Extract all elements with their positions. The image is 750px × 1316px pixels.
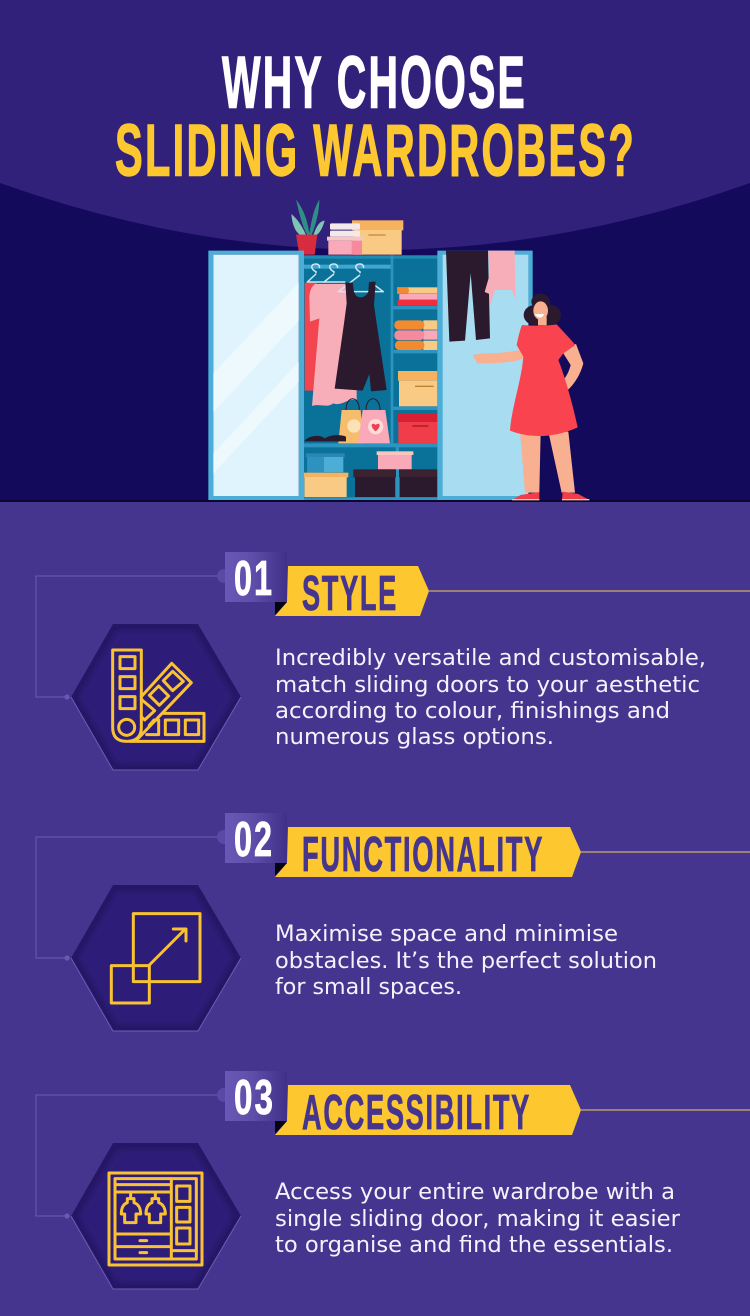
illustration: wardrobe and woman — [208, 199, 589, 500]
left sliding door with mirror — [208, 251, 304, 500]
body text — [275, 922, 657, 1000]
heading ribbon — [275, 566, 750, 621]
body text: Incredibly versatile and customisable, — [275, 646, 706, 671]
number badge: 01 — [234, 552, 274, 606]
hexagon icon background — [71, 624, 241, 770]
hexagon icon background — [71, 885, 241, 1031]
body text: for small spaces. — [275, 975, 462, 1000]
icon: expanding squares with arrow — [111, 914, 200, 1003]
section 02: functionality — [36, 813, 750, 1031]
body text: Maximise space and minimise — [275, 922, 618, 947]
shelf boxes — [397, 371, 437, 443]
connector line — [36, 569, 231, 700]
body text: obstacles. It’s the perfect solution — [275, 949, 657, 974]
background: domed header — [0, 0, 750, 250]
connector line — [36, 830, 231, 961]
door handles — [280, 371, 461, 413]
number badge: 02 — [234, 813, 274, 867]
icon: colour swatches — [113, 650, 204, 741]
shopping bags and shoes — [305, 399, 390, 443]
wardrobe interior — [304, 255, 438, 500]
icon: wardrobe — [109, 1173, 202, 1265]
connector line — [36, 1088, 231, 1219]
heading ribbon: STYLE — [302, 567, 398, 621]
hanging clothes — [305, 283, 357, 406]
ground line — [0, 500, 750, 502]
hangers — [307, 264, 383, 292]
hexagon icon background — [71, 1143, 241, 1289]
background: dark stage — [0, 150, 750, 501]
woman — [473, 294, 589, 500]
body text — [275, 1180, 681, 1258]
section 01: style — [36, 552, 750, 770]
body text: numerous glass options. — [275, 725, 554, 750]
body text — [275, 646, 706, 750]
body text: match sliding doors to your aesthetic — [275, 673, 700, 698]
body text: according to colour, finishings and — [275, 699, 670, 724]
lower storage boxes — [304, 451, 437, 497]
books and boxes on top — [327, 220, 403, 255]
section 03: accessibility — [36, 1071, 750, 1289]
right sliding door — [437, 251, 533, 500]
icon: plant — [291, 199, 325, 255]
folded stacks on shelves — [394, 287, 437, 350]
heading ribbon: FUNCTIONALITY — [302, 828, 544, 882]
body text: to organise and find the essentials. — [275, 1233, 673, 1258]
number badge: 03 — [234, 1071, 275, 1125]
black dress — [335, 282, 387, 391]
body text: Access your entire wardrobe with a — [275, 1180, 675, 1205]
title — [115, 42, 636, 192]
clothes on right door — [446, 251, 515, 342]
body text: single sliding door, making it easier — [275, 1207, 681, 1232]
heading ribbon: ACCESSIBILITY — [302, 1086, 531, 1140]
